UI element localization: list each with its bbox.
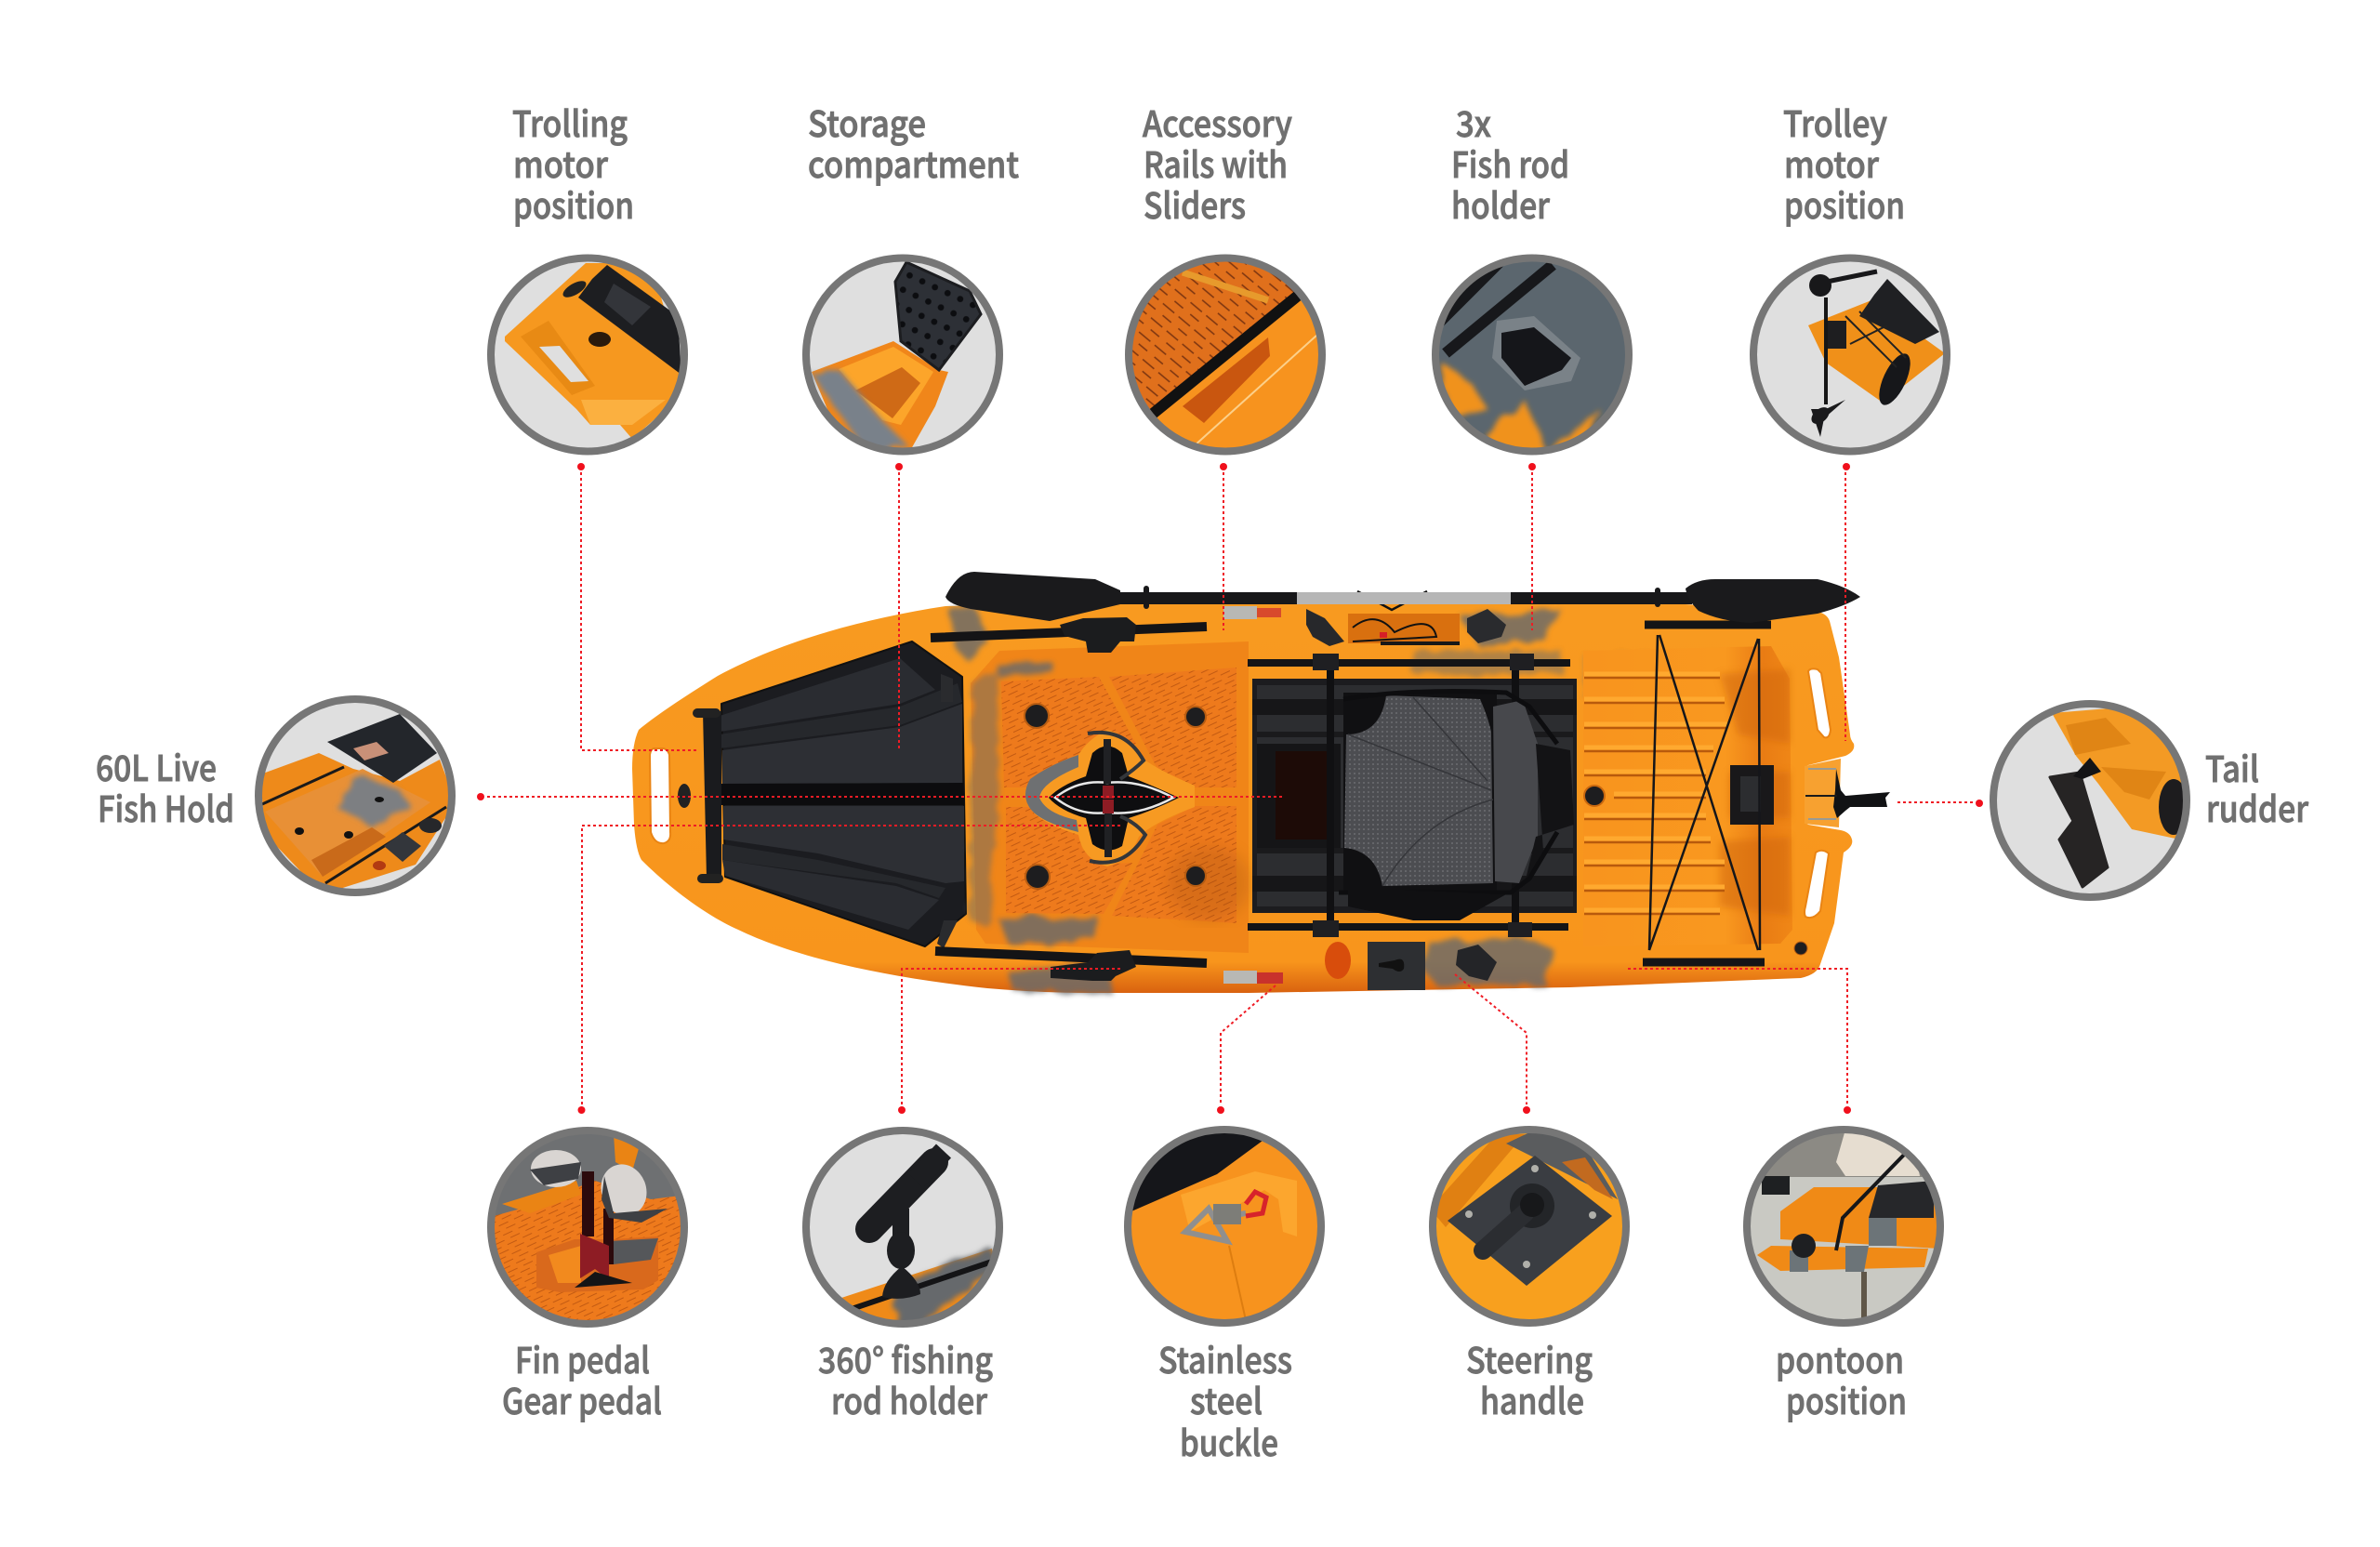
callout: tail rudder: rudder <box>2206 781 2308 832</box>
label: 360° fishing <box>818 1332 993 1383</box>
seat back mesh <box>1493 700 1538 883</box>
seat back pad <box>1525 744 1574 883</box>
storage hatch cover <box>693 641 966 948</box>
callout: trolley motor position: motor <box>1784 137 1879 188</box>
photo circle <box>1751 1133 1937 1319</box>
photo circle <box>1997 707 2183 893</box>
photo circle <box>495 1134 681 1320</box>
well ribs highlight <box>1584 674 1727 910</box>
side accessory rails <box>931 617 1207 981</box>
callout: pontoon position <box>1744 1125 1945 1424</box>
label: Trolley <box>1783 96 1887 147</box>
callout: accessory rails with sliders: Rails with <box>1144 137 1288 188</box>
drain plug <box>1584 786 1605 806</box>
anti-slip deck mats <box>1001 668 1236 923</box>
rod holder port <box>1456 945 1497 981</box>
callout: 3x fish rod holder: holder <box>1451 178 1550 229</box>
callout: pontoon position: position <box>1786 1373 1907 1424</box>
label: Trolling <box>512 96 628 147</box>
callout: storage compartment <box>802 96 1019 456</box>
well ribs shadow line <box>1584 678 1727 914</box>
stern tracks <box>1643 625 1771 962</box>
callout: fin pedal and gear pedal: Gear pedal <box>502 1373 662 1424</box>
callout: trolley motor position: position <box>1784 178 1905 229</box>
photo circle <box>1439 262 1625 448</box>
buckles <box>1223 606 1283 984</box>
right blade <box>1686 579 1860 623</box>
photo circle <box>1131 1133 1317 1319</box>
photo circle <box>262 703 448 889</box>
tail rudder mount <box>1805 769 1890 819</box>
callout: trolling motor position: motor <box>513 137 608 188</box>
callout: 3x fish rod holder: Fish rod <box>1451 137 1569 188</box>
callout: fin pedal and gear pedal <box>487 1127 688 1424</box>
seat tray <box>1248 654 1577 937</box>
callout: 60L live fish hold: Fish Hold <box>98 781 234 832</box>
top console with fish rod holders <box>1306 591 1506 646</box>
drain scupper <box>1325 942 1351 979</box>
label: Accessory <box>1143 96 1292 147</box>
kayak top view <box>632 572 1890 993</box>
callout: stainless steel buckle: steel <box>1190 1373 1263 1424</box>
stern carry handle openings <box>1805 668 1831 918</box>
label: Tail <box>2205 741 2259 792</box>
bow mounting eyelet <box>678 784 691 808</box>
callout: tail rudder <box>1990 700 2308 901</box>
callout: storage compartment: compartment <box>808 137 1019 188</box>
callout: 3x fish rod holder <box>1432 96 1633 456</box>
seat seams <box>1348 697 1493 886</box>
steering plate <box>1368 942 1425 990</box>
mat shade <box>1167 846 1250 920</box>
photo circle <box>495 262 681 448</box>
callout: trolley motor position <box>1751 96 1951 456</box>
photo circle <box>810 262 996 448</box>
tray window <box>1276 751 1327 840</box>
photo circle <box>810 1134 996 1320</box>
gray camouflage patches <box>948 609 1659 993</box>
centre pedal well <box>1025 730 1195 866</box>
label: pontoon <box>1776 1332 1904 1383</box>
seat base mesh <box>1344 695 1493 886</box>
top rod holder <box>1060 617 1136 653</box>
seat rails <box>1248 663 1570 927</box>
deck post sockets <box>1025 704 1206 889</box>
callout: trolling motor position <box>487 96 688 456</box>
callout: accessory rails with sliders <box>1125 96 1326 456</box>
callout: stainless steel buckle: buckle <box>1180 1415 1278 1466</box>
stern rudder lobe <box>1805 759 1841 827</box>
rear eyelet <box>1794 942 1807 955</box>
left blade <box>945 572 1120 621</box>
label: Steering <box>1466 1332 1593 1383</box>
bottom console <box>1325 942 1497 990</box>
callout: accessory rails with sliders: Sliders <box>1144 178 1246 229</box>
forward well <box>948 609 1659 993</box>
photo circle <box>1436 1133 1622 1319</box>
callout leader lines <box>477 463 1983 1114</box>
seat base dark surround <box>1343 693 1497 894</box>
callout: steering handle <box>1430 1126 1631 1424</box>
pedal mechanism <box>1049 746 1179 851</box>
callout: steering handle: handle <box>1480 1373 1584 1424</box>
label: 60L Live <box>96 740 217 791</box>
callout: trolling motor position: position <box>513 178 634 229</box>
label: Fin pedal <box>515 1332 650 1383</box>
photo circle <box>1132 262 1318 448</box>
black transducer box <box>1730 765 1774 825</box>
well shadows <box>1720 669 1790 916</box>
label: Storage <box>808 96 926 147</box>
kayak hull <box>632 604 1854 993</box>
paddle <box>945 572 1860 623</box>
callout: 360 degree fishing rod holder: rod holder <box>831 1373 987 1424</box>
bow carry handle opening <box>650 748 670 843</box>
bungee cords <box>1649 635 1760 950</box>
label: 3x <box>1456 96 1491 147</box>
seat frame posts <box>1330 657 1515 934</box>
photo circle <box>1757 262 1943 448</box>
rear tank well <box>1583 625 1807 962</box>
callout: 60L live fish hold <box>96 695 456 896</box>
bottom rod holder <box>1051 950 1136 981</box>
callout: stainless steel buckle <box>1124 1120 1325 1466</box>
callout: 360 degree fishing rod holder <box>802 1127 1003 1424</box>
label: Stainless <box>1158 1332 1292 1383</box>
